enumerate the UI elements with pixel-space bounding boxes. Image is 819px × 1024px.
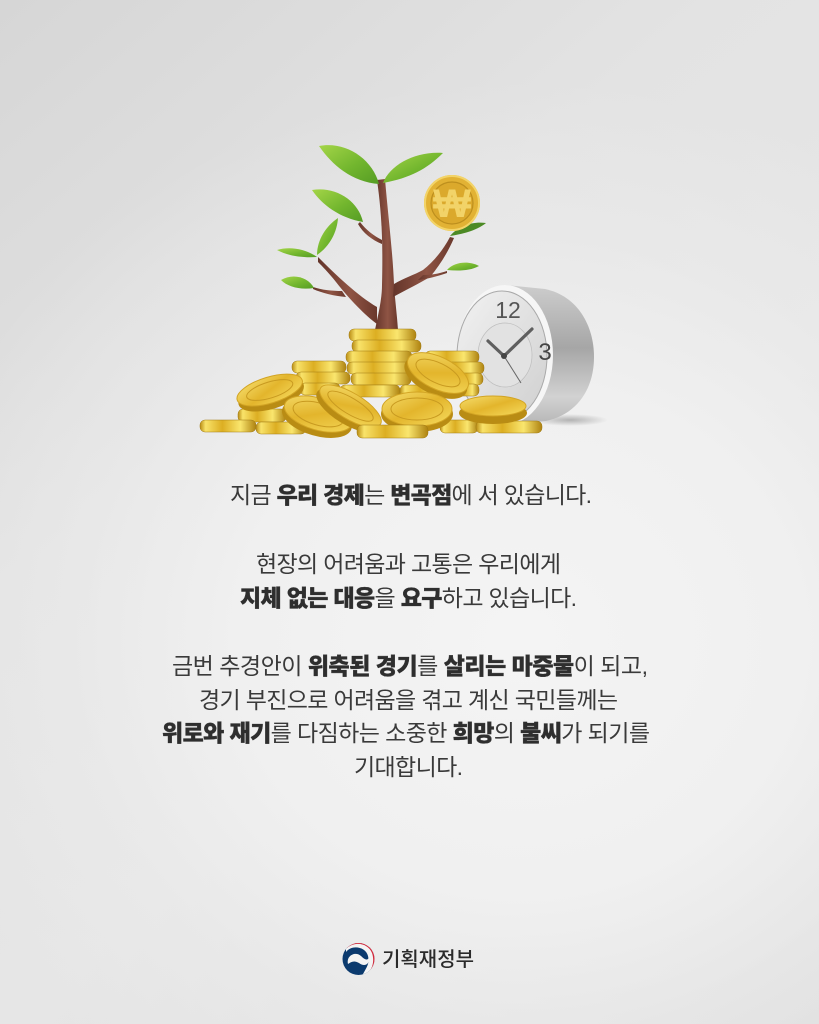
paragraph 3: 위로와 재기를 다짐하는 소중한 희망의 불씨가 되기를	[162, 720, 650, 746]
paragraph 2: 현장의 어려움과 고통은 우리에게	[256, 551, 561, 577]
paragraph 3	[162, 653, 650, 780]
logo: Ministry of Economy and Finance	[342, 943, 474, 975]
icon: silver clock	[457, 285, 594, 425]
tilted coins	[233, 344, 527, 445]
message text	[162, 482, 650, 780]
icon: silver clock: 3	[538, 339, 552, 366]
paragraph 2	[240, 551, 577, 611]
coin stacks	[200, 329, 542, 434]
icon: taegeuk	[342, 943, 374, 975]
paragraph 1: 지금 우리 경제는 변곡점에 서 있습니다.	[230, 482, 592, 508]
paragraph 3: 금번 추경안이 위축된 경기를 살리는 마중물이 되고,	[172, 653, 648, 679]
paragraph 2: 지체 없는 대응을 요구하고 있습니다.	[240, 585, 577, 611]
icon: tree trunk and branches	[313, 179, 454, 330]
illustration: money tree, coins and clock	[200, 145, 608, 445]
paragraph 3: 기대합니다.	[354, 754, 463, 780]
icon: silver clock: 12	[495, 297, 521, 323]
paragraph 3: 경기 부진으로 어려움을 겪고 계신 국민들께는	[199, 687, 618, 713]
icon: won coin	[424, 175, 480, 231]
wordmark: 기획재정부	[382, 948, 474, 971]
icon: leaves	[277, 145, 486, 289]
icon: won coin: ₩	[433, 182, 471, 226]
ground shadow	[532, 414, 608, 426]
